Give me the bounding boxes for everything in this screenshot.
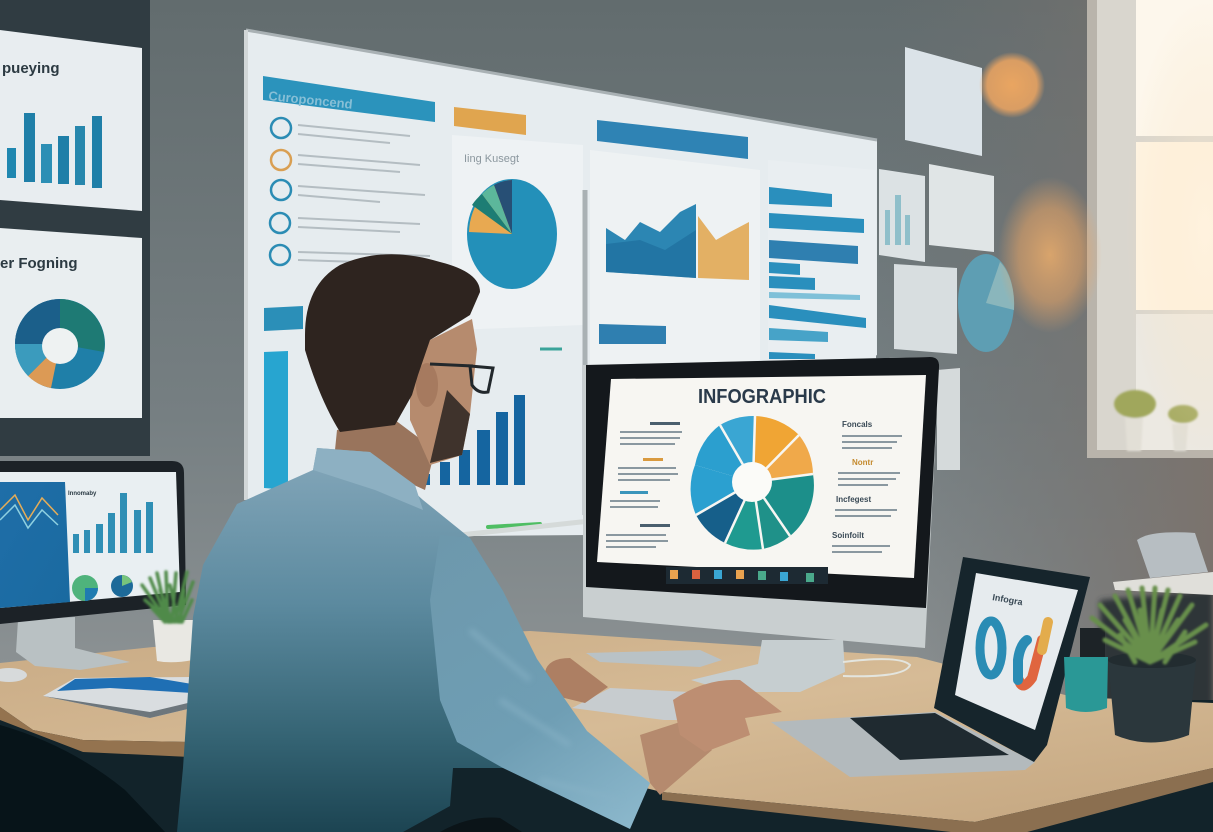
notebook xyxy=(43,677,192,718)
chair back right xyxy=(1113,532,1213,595)
donut chart xyxy=(691,416,814,550)
dark area right of desk xyxy=(1100,590,1213,710)
note xyxy=(937,368,960,470)
right labels: Nontr xyxy=(852,458,873,467)
desk xyxy=(0,631,1213,832)
hand left xyxy=(545,658,608,703)
cable xyxy=(843,659,910,676)
neck xyxy=(335,420,435,490)
note xyxy=(905,47,982,156)
ear xyxy=(416,363,438,407)
screen xyxy=(597,375,926,578)
right labels xyxy=(832,420,873,540)
right wall section xyxy=(880,0,1213,720)
plant right xyxy=(1092,588,1206,742)
seat shadow xyxy=(440,818,522,832)
marker on tray xyxy=(488,524,540,527)
mouse xyxy=(0,668,27,682)
dock xyxy=(666,567,828,584)
area chart xyxy=(606,204,749,280)
note xyxy=(929,164,994,252)
left monitor: Innomaby xyxy=(68,491,97,497)
whiteboard: Iing Kusegt xyxy=(464,153,519,165)
icon: window plants xyxy=(1114,390,1198,451)
window xyxy=(1087,0,1213,458)
right labels: Foncals xyxy=(842,420,873,429)
chair left xyxy=(0,725,165,832)
panel: board section right xyxy=(590,150,760,375)
wall notes xyxy=(879,47,1014,470)
u chart on laptop xyxy=(1018,622,1048,686)
sleeve xyxy=(430,535,650,829)
forearm xyxy=(640,722,712,795)
keyboard back xyxy=(586,650,722,667)
laptop: Infogra xyxy=(992,592,1024,607)
bar chart xyxy=(420,395,525,485)
lens flare xyxy=(979,0,1213,460)
glasses xyxy=(430,364,493,392)
shirt body xyxy=(177,448,503,832)
sleeve wrinkles xyxy=(470,630,620,800)
pen cup xyxy=(1064,628,1108,712)
keyboard xyxy=(572,688,690,720)
board heading xyxy=(263,76,435,122)
panel: bar poster xyxy=(0,30,142,211)
left monitor xyxy=(0,461,186,670)
pie chart xyxy=(467,179,557,289)
laptop xyxy=(771,557,1090,777)
beard xyxy=(430,390,470,463)
small labels xyxy=(264,306,303,331)
person xyxy=(177,254,782,832)
plant left xyxy=(142,572,193,662)
collar xyxy=(313,448,423,510)
panel: bar poster: pueying xyxy=(2,60,60,77)
note xyxy=(879,169,925,262)
donut on laptop xyxy=(980,621,1002,675)
hair xyxy=(305,254,480,432)
face xyxy=(410,319,477,465)
note xyxy=(894,264,957,354)
main monitor xyxy=(583,357,939,692)
dark floor under desk xyxy=(0,700,1213,832)
small pies xyxy=(72,575,133,601)
left labels xyxy=(606,422,682,548)
panel: donut poster xyxy=(0,228,142,418)
icon: round chart xyxy=(958,254,1014,352)
panel: donut poster: er Fogning xyxy=(0,255,78,272)
monitor stand xyxy=(691,640,845,692)
title: INFOGRAPHIC xyxy=(698,386,826,408)
bar chart xyxy=(73,493,153,553)
monitor stand xyxy=(16,617,130,670)
panel: board section pie xyxy=(452,135,583,330)
whiteboard: Curoponcend xyxy=(268,88,353,112)
right labels: Soinfoilt xyxy=(832,531,864,540)
bar list chart xyxy=(769,187,866,359)
whiteboard xyxy=(246,30,877,536)
board list xyxy=(270,118,291,265)
right labels: Incfegest xyxy=(836,495,871,504)
dark wall poster board xyxy=(0,0,150,456)
hand right xyxy=(673,680,782,752)
